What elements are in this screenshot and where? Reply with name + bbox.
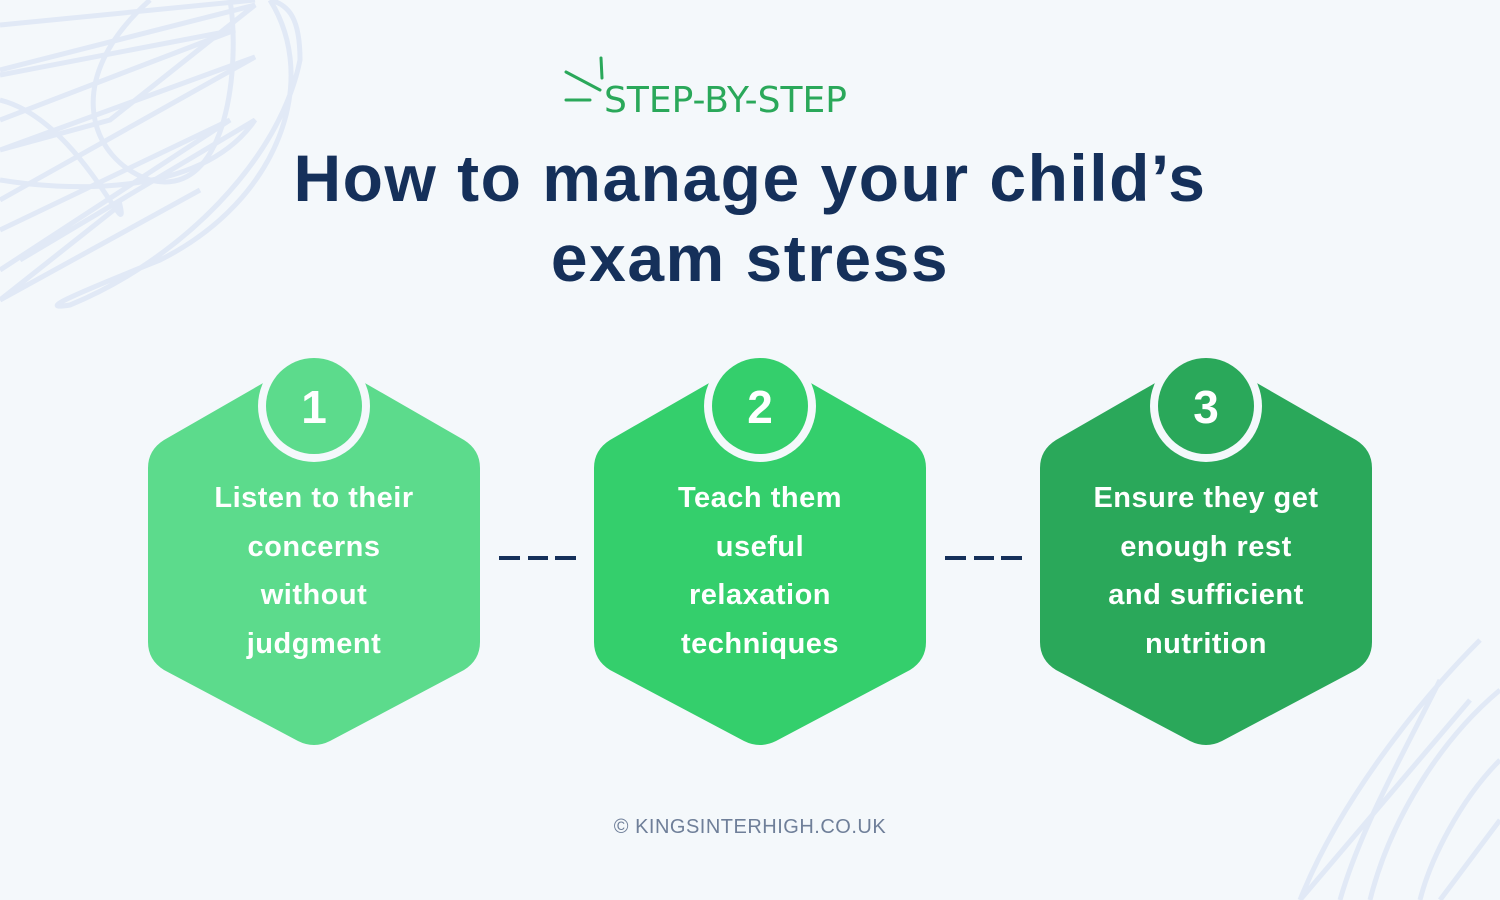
hexagon 3 bbox=[1040, 350, 1372, 745]
step 3 text bbox=[1093, 482, 1319, 660]
title: exam stress bbox=[551, 221, 949, 295]
step 2 text: relaxation bbox=[689, 579, 831, 611]
step 3 text: and sufficient bbox=[1108, 579, 1304, 611]
connector dashes 2-3 bbox=[945, 556, 1022, 560]
step 2 text: techniques bbox=[681, 628, 839, 660]
step 2 text bbox=[678, 482, 842, 660]
step 2 text: Teach them bbox=[678, 482, 842, 514]
hexagon 2: 2 bbox=[747, 381, 773, 433]
connector dashes 1-2 bbox=[499, 556, 576, 560]
hexagon 2 bbox=[594, 350, 926, 745]
subtitle: step-by-step: STEP-BY-STEP bbox=[604, 80, 847, 121]
step 1 text: concerns bbox=[248, 530, 380, 562]
step 3 text: nutrition bbox=[1145, 628, 1267, 660]
step 1 text bbox=[214, 482, 414, 660]
step 1 text: without bbox=[261, 579, 367, 611]
title: How to manage your child’s bbox=[293, 141, 1207, 215]
hexagon 1 bbox=[148, 350, 480, 745]
subtitle: step-by-step bbox=[564, 56, 847, 121]
step 3 text: Ensure they get bbox=[1093, 482, 1319, 514]
title bbox=[293, 141, 1207, 295]
step 1 text: judgment bbox=[247, 628, 381, 660]
hexagon 1: 1 bbox=[301, 381, 327, 433]
footer: © KINGSINTERHIGH.CO.UK bbox=[614, 816, 886, 838]
hexagon 3: 3 bbox=[1193, 381, 1219, 433]
step 1 text: Listen to their bbox=[214, 482, 414, 514]
step 2 text: useful bbox=[716, 530, 804, 562]
step 3 text: enough rest bbox=[1120, 530, 1292, 562]
